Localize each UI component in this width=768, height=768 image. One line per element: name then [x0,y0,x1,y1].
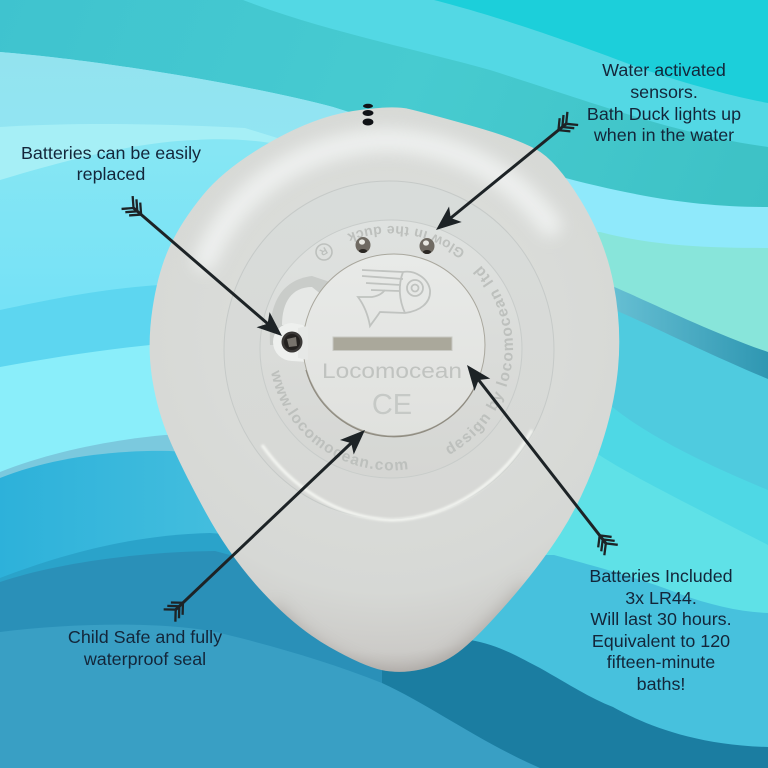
CE mark: CE [372,389,412,421]
callout: water activated sensors: Bath Duck lights up [587,104,741,124]
embossed plate text [272,226,513,470]
logo: fish [358,270,430,326]
callout: child safe: Child Safe and fully [68,627,222,647]
callout: batteries included: baths! [637,674,685,694]
callout: batteries included [589,566,733,694]
callout: child safe: waterproof seal [83,649,206,669]
product: bath duck underside [150,104,620,672]
inner recess ring [224,181,554,519]
arrow: batteries included [459,359,619,556]
callout: water activated sensors [587,60,741,145]
ring lip highlight [262,430,532,520]
embossed plate text: Glow in the duck [347,226,464,258]
callout: batteries can be easily replaced: replaced [77,164,145,184]
embossed plate text: design by locomocean ltd [446,266,513,454]
embossed plate text: R [317,244,329,258]
sensor pins [356,237,434,254]
battery cover disk [298,254,485,437]
callout: child safe [68,627,222,669]
screw [282,332,302,352]
body rim highlight [205,140,550,682]
bottom shading [270,590,530,682]
label plate [260,220,522,478]
callout: batteries included: Will last 30 hours. [590,609,732,629]
brand name: Locomocean [322,360,462,383]
arrow: waterproof seal [163,423,372,623]
callout: batteries can be easily replaced [21,143,201,184]
embossed plate text: www.locomocean.com [272,370,408,470]
arrow: batteries replaced [121,195,289,344]
callout: batteries can be easily replaced: Batteries can be easily [21,143,201,163]
callout: water activated sensors: sensors. [630,82,698,102]
dots: vent holes [362,104,374,126]
body shell [150,107,619,672]
battery slot [333,337,452,350]
callout: water activated sensors: when in the water [593,125,734,145]
callout: batteries included: Batteries Included [589,566,733,586]
callout: batteries included: Equivalent to 120 [592,631,730,651]
arrow: sensors [430,111,579,238]
callout: batteries included: fifteen-minute [607,652,715,672]
callout: water activated sensors: Water activated [602,60,726,80]
callout: batteries included: 3x LR44. [625,588,697,608]
right side layers [500,232,768,360]
tab join [298,326,308,360]
left lower layers [0,430,300,640]
screw tab [273,323,308,362]
screw recess [270,276,330,345]
